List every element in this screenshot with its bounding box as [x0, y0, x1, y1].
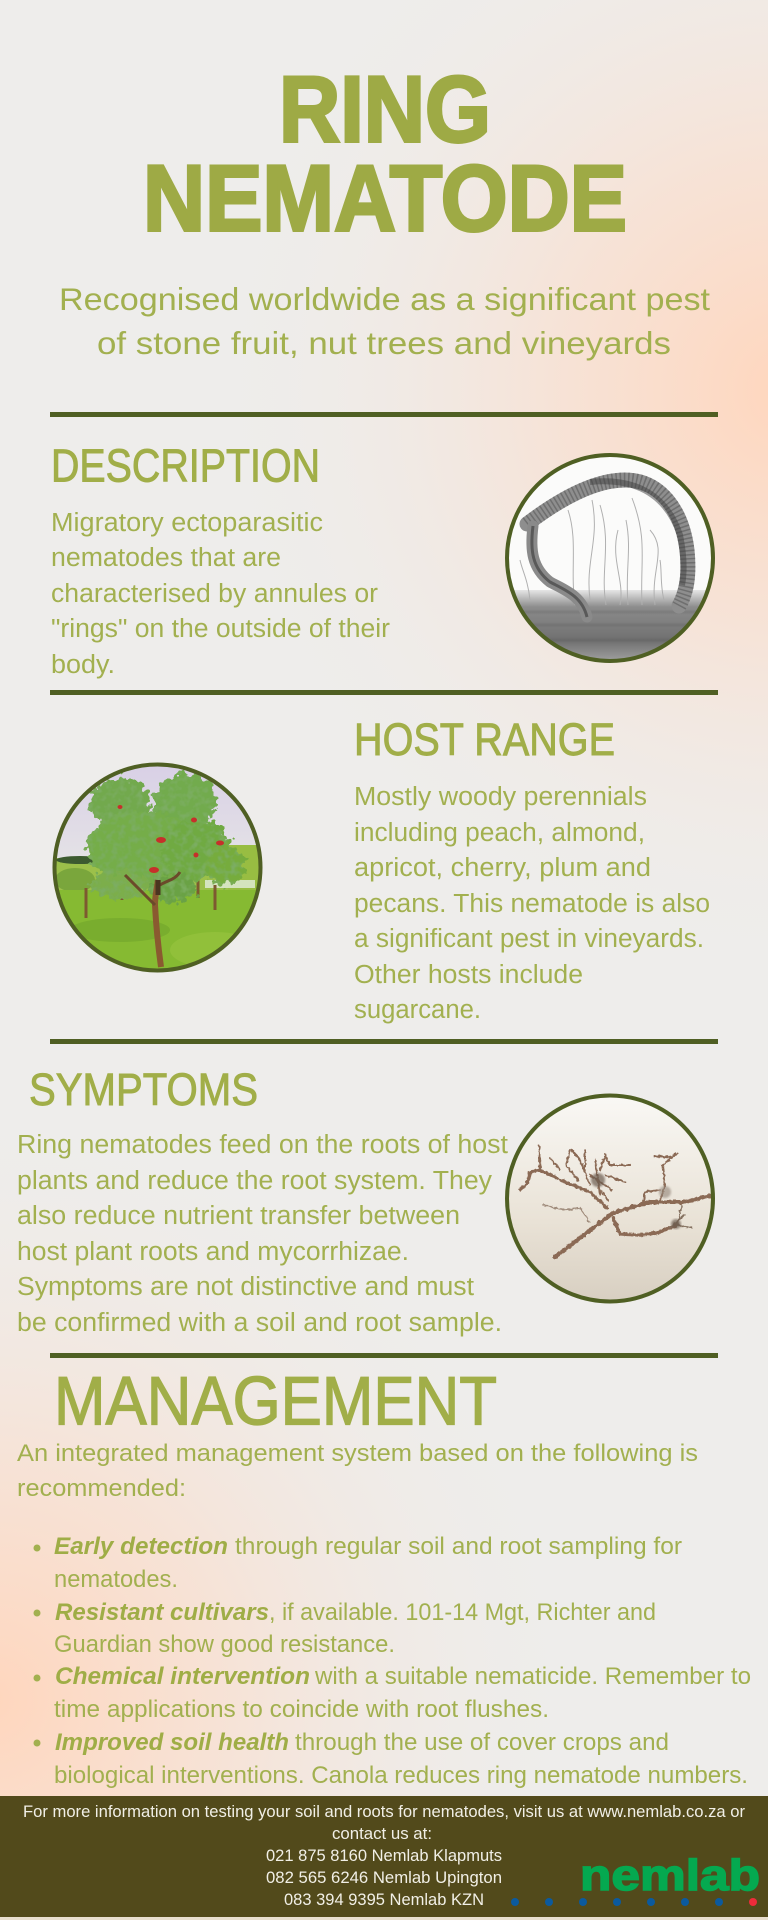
text: symptoms body: host plant roots and mycorrhizae. [17, 1238, 409, 1266]
text: symptoms body: also reduce nutrient transfer between [17, 1202, 460, 1230]
list item: improved soil health [34, 1729, 748, 1789]
text: description body [51, 509, 391, 679]
text: description body: characterised by annules or [51, 580, 379, 608]
panel: host range [50, 714, 710, 1024]
text: management intro: recommended: [17, 1475, 186, 1502]
text: host range body [354, 783, 710, 1024]
text: host range body: pecans. This nematode is also [354, 890, 710, 918]
text: host range body: Other hosts include [354, 961, 583, 989]
image: nematode micrograph [500, 454, 720, 668]
list item: early detection [34, 1533, 682, 1593]
title [143, 56, 627, 250]
text: description body: "rings" on the outside of their [51, 615, 391, 643]
list item: early detection: through regular soil and root sampling for [235, 1533, 682, 1560]
text: description body: Migratory ectoparasitic [51, 509, 323, 537]
text: symptoms body: plants and reduce the root system. They [17, 1167, 492, 1195]
heading: symptoms: SYMPTOMS [29, 1064, 258, 1115]
panel: symptoms [17, 1064, 720, 1337]
text: host range body: including peach, almond, [354, 819, 645, 847]
list item: early detection: Early detection [54, 1533, 228, 1560]
heading: host range: HOST RANGE [354, 714, 615, 765]
text: symptoms body: be confirmed with a soil and root sample. [17, 1309, 502, 1337]
list item: resistant cultivars: Resistant cultivars [55, 1599, 269, 1626]
subtitle: Recognised worldwide as a significant pest [59, 281, 710, 317]
list item: resistant cultivars: , if available. 101-14 Mgt, Richter and [269, 1599, 656, 1626]
list item: resistant cultivars: Guardian show good resistance. [54, 1631, 395, 1658]
image: peach tree in orchard [50, 760, 268, 980]
subtitle: of stone fruit, nut trees and vineyards [97, 325, 671, 361]
image: damaged roots [500, 1090, 720, 1310]
footer text: For more information on testing your soil and roots for nematodes, visit us at www.nemlab.co.za or [23, 1802, 745, 1821]
list item: improved soil health: biological interventions. Canola reduces ring nematode numbers. [54, 1762, 748, 1789]
text: symptoms body: Ring nematodes feed on the roots of host [17, 1131, 508, 1159]
text: management intro [17, 1440, 698, 1502]
footer text: 082 565 6246 Nemlab Upington [266, 1868, 502, 1887]
text: description body: nematodes that are [51, 544, 281, 572]
footer band [0, 1796, 768, 1920]
panel: management [17, 1362, 751, 1789]
list item: chemical intervention: with a suitable nematicide. Remember to [314, 1663, 751, 1690]
title: RING [279, 56, 491, 162]
footer text: 021 875 8160 Nemlab Klapmuts [266, 1846, 502, 1865]
subtitle [59, 281, 710, 361]
list item: chemical intervention [34, 1663, 751, 1723]
text: host range body: a significant pest in vineyards. [354, 925, 704, 953]
list item: improved soil health: through the use of cover crops and [295, 1729, 669, 1756]
text: host range body: sugarcane. [354, 996, 481, 1024]
footer text: contact us at: [332, 1824, 432, 1843]
text: description body: body. [51, 651, 115, 679]
heading: management: MANAGEMENT [54, 1362, 497, 1440]
list item: resistant cultivars [34, 1599, 656, 1658]
footer text: 083 394 9395 Nemlab KZN [284, 1890, 484, 1909]
list item: early detection: nematodes. [54, 1566, 178, 1593]
list item: chemical intervention: time applications to coincide with root flushes. [54, 1696, 549, 1723]
list item: chemical intervention: Chemical intervention [55, 1663, 310, 1690]
title: NEMATODE [143, 146, 627, 250]
text: symptoms body: Symptoms are not distinctive and must [17, 1273, 474, 1301]
list item: improved soil health: Improved soil health [55, 1729, 289, 1756]
text: symptoms body [17, 1131, 508, 1337]
text: management intro: An integrated management system based on the following is [17, 1440, 698, 1467]
text: host range body: Mostly woody perennials [354, 783, 647, 811]
panel: description [51, 440, 720, 679]
logo: nemlab: nemlab [580, 1851, 760, 1900]
text: host range body: apricot, cherry, plum and [354, 854, 651, 882]
logo: nemlab [511, 1851, 760, 1906]
footer text [23, 1802, 745, 1909]
heading: description: DESCRIPTION [51, 440, 320, 492]
